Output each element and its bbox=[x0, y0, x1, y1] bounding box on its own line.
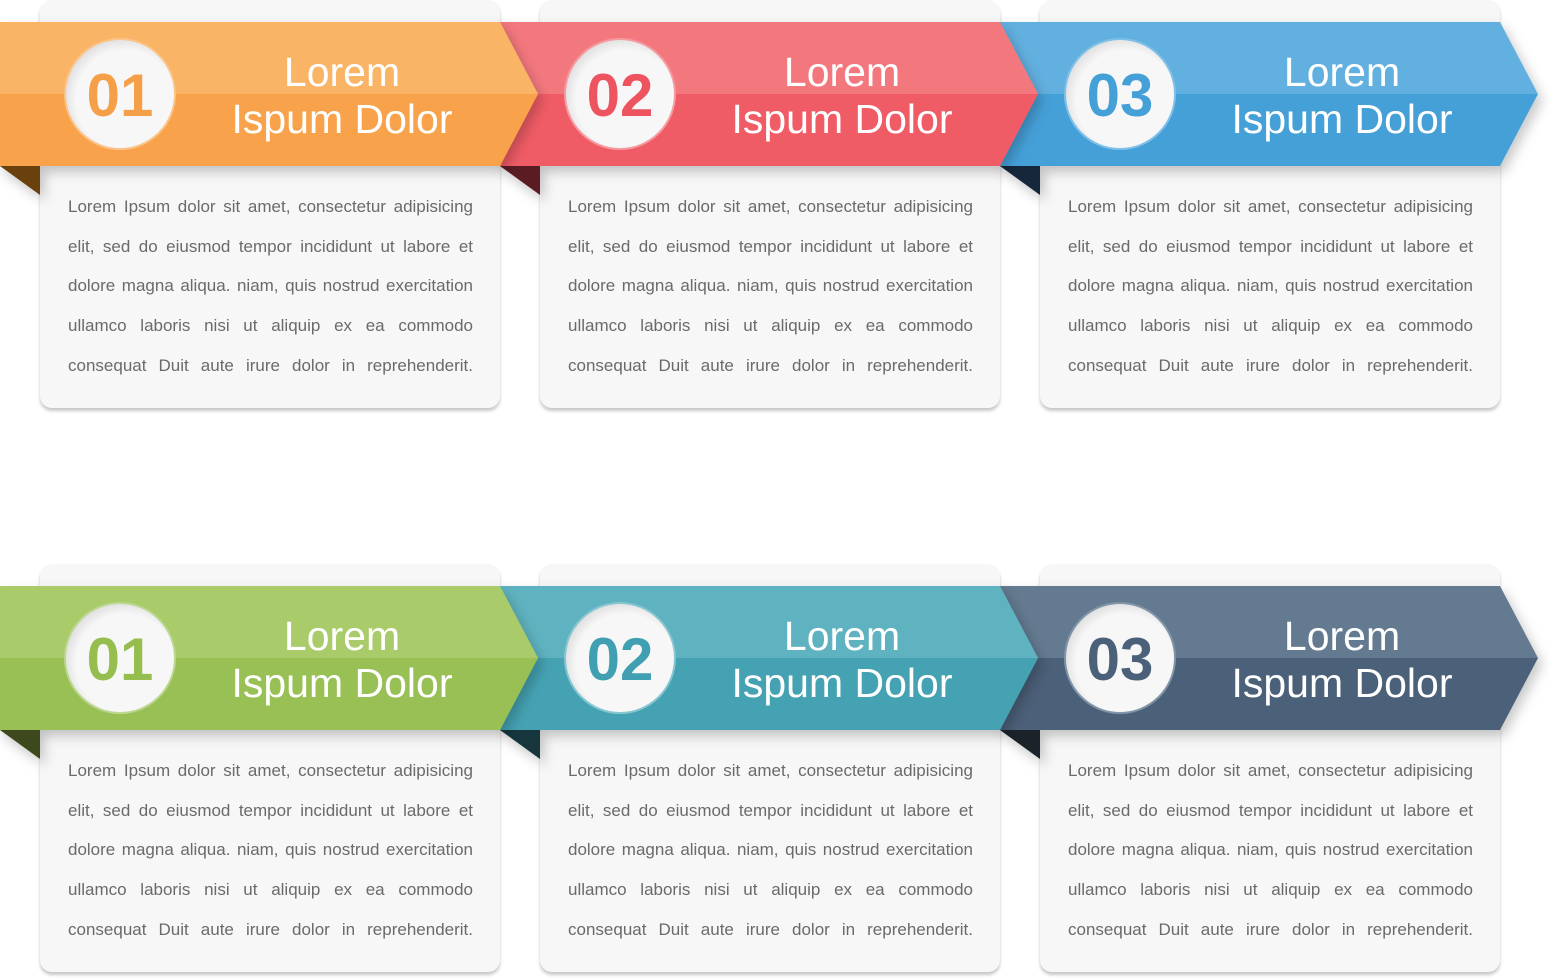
card: bottom 1 bbox=[40, 564, 500, 972]
ribbon: top 2 bbox=[500, 22, 1038, 195]
text: bottom 3: Lorem Ipsum dolor sit amet, consectetur adipisicing elit, sed do eiusmod tempor incididunt ut labore et dolore magna aliqua. niam, quis nostrud exercitation ullamco laboris nisi ut aliquip ex ea commodo consequat Duit aute irure dolor in reprehenderit. bbox=[1068, 761, 1473, 939]
card: top 3 bbox=[1040, 0, 1500, 408]
ribbon: bottom 1: Ispum Dolor bbox=[231, 660, 453, 706]
ribbon: top 1 bbox=[0, 22, 538, 195]
text: top 1: Lorem Ipsum dolor sit amet, consectetur adipisicing elit, sed do eiusmod tempor incididunt ut labore et dolore magna aliqua. niam, quis nostrud exercitation ullamco laboris nisi ut aliquip ex ea commodo consequat Duit aute irure dolor in reprehenderit. bbox=[68, 197, 473, 375]
ribbon: bottom 3: 03 bbox=[1087, 626, 1153, 693]
ribbon: top 3 bbox=[1000, 22, 1538, 195]
ribbon: bottom 2: 02 bbox=[587, 626, 653, 693]
text: bottom 2: Lorem Ipsum dolor sit amet, consectetur adipisicing elit, sed do eiusmod tempor incididunt ut labore et dolore magna aliqua. niam, quis nostrud exercitation ullamco laboris nisi ut aliquip ex ea commodo consequat Duit aute irure dolor in reprehenderit. bbox=[568, 761, 973, 939]
ribbon: bottom 3 bbox=[1000, 586, 1538, 759]
ribbon: top 2: 02 bbox=[587, 62, 653, 129]
card: bottom 2 bbox=[540, 564, 1000, 972]
card: top 1 bbox=[40, 0, 500, 408]
ribbon: bottom 2 bbox=[500, 586, 1038, 759]
ribbon: top 2: Ispum Dolor bbox=[731, 96, 953, 142]
ribbon: top 3: Lorem bbox=[1284, 49, 1400, 95]
ribbon: bottom 3: Ispum Dolor bbox=[1231, 660, 1453, 706]
ribbon: bottom 2: Lorem bbox=[784, 613, 900, 659]
text: top 3: Lorem Ipsum dolor sit amet, consectetur adipisicing elit, sed do eiusmod tempor incididunt ut labore et dolore magna aliqua. niam, quis nostrud exercitation ullamco laboris nisi ut aliquip ex ea commodo consequat Duit aute irure dolor in reprehenderit. bbox=[1068, 197, 1473, 375]
ribbon: top 1: Lorem bbox=[284, 49, 400, 95]
ribbon: top 1: 01 bbox=[87, 62, 153, 129]
ribbon: bottom 2: Ispum Dolor bbox=[731, 660, 953, 706]
text: bottom 1: Lorem Ipsum dolor sit amet, consectetur adipisicing elit, sed do eiusmod tempor incididunt ut labore et dolore magna aliqua. niam, quis nostrud exercitation ullamco laboris nisi ut aliquip ex ea commodo consequat Duit aute irure dolor in reprehenderit. bbox=[68, 761, 473, 939]
card: bottom 3 bbox=[1040, 564, 1500, 972]
ribbon: bottom 1: Lorem bbox=[284, 613, 400, 659]
text: top 2: Lorem Ipsum dolor sit amet, consectetur adipisicing elit, sed do eiusmod tempor incididunt ut labore et dolore magna aliqua. niam, quis nostrud exercitation ullamco laboris nisi ut aliquip ex ea commodo consequat Duit aute irure dolor in reprehenderit. bbox=[568, 197, 973, 375]
ribbon: top 2: Lorem bbox=[784, 49, 900, 95]
ribbon: top 3: Ispum Dolor bbox=[1231, 96, 1453, 142]
ribbon: bottom 1: 01 bbox=[87, 626, 153, 693]
ribbon: bottom 3: Lorem bbox=[1284, 613, 1400, 659]
ribbon: top 3: 03 bbox=[1087, 62, 1153, 129]
card: top 2 bbox=[540, 0, 1000, 408]
ribbon: bottom 1 bbox=[0, 586, 538, 759]
ribbon: top 1: Ispum Dolor bbox=[231, 96, 453, 142]
